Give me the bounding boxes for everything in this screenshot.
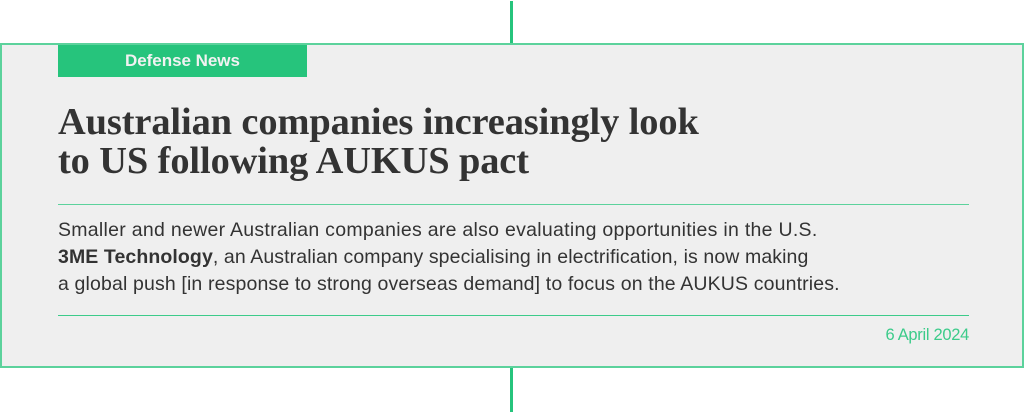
text block: article summary	[58, 219, 840, 295]
date: 6 April 2024	[885, 326, 969, 344]
connector line: bottom	[510, 368, 513, 412]
heading	[58, 101, 699, 182]
tag: Defense News: Defense News	[125, 51, 240, 70]
connector line: top	[510, 1, 513, 44]
text block: article summary: Smaller and newer Australian companies are also evaluating opportunities in the U.S.	[58, 219, 818, 241]
heading: to US following AUKUS pact	[58, 140, 529, 182]
heading: Australian companies increasingly look	[58, 101, 699, 143]
text block: article summary: a global push [in response to strong overseas demand] to focus on the AUKUS countries.	[58, 273, 840, 295]
divider: upper	[58, 204, 969, 205]
panel: news card	[0, 43, 1024, 368]
divider: lower	[58, 315, 969, 316]
tag: Defense News	[58, 45, 307, 77]
text block: article summary: 3ME Technology, an Australian company specialising in electrification, is now making	[58, 246, 808, 268]
